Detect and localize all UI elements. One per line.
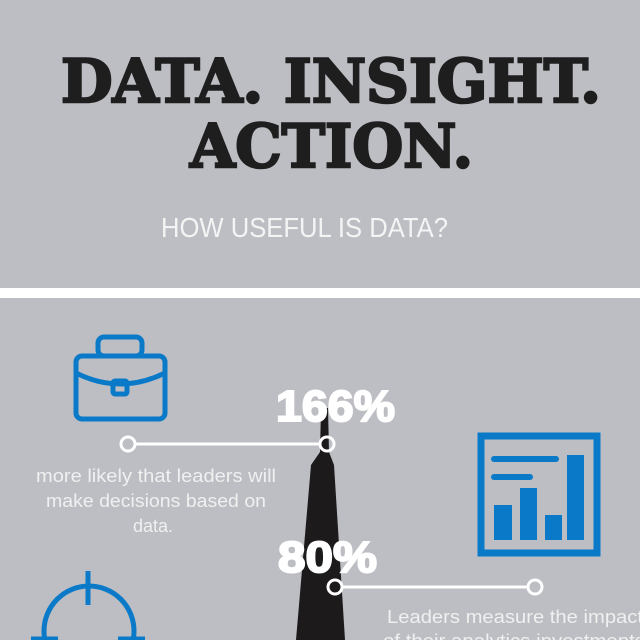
stat 166% xyxy=(121,382,395,451)
title xyxy=(61,47,601,182)
text: 166% description: data. xyxy=(133,516,173,536)
tower spire xyxy=(296,408,345,640)
divider stripe xyxy=(0,288,640,298)
title: DATA. INSIGHT. xyxy=(61,47,601,117)
stat 80%: 80% xyxy=(278,533,377,582)
stat 80% xyxy=(278,533,542,594)
icon: target xyxy=(31,571,145,640)
icon: bar chart xyxy=(481,436,597,553)
subtitle: HOW USEFUL IS DATA? xyxy=(161,212,448,243)
title: ACTION. xyxy=(189,112,473,182)
text: 80% description xyxy=(383,607,640,640)
text: 80% description: Leaders measure the impact xyxy=(387,607,640,627)
text: 166% description: make decisions based on xyxy=(46,491,266,511)
text: 166% description: more likely that leaders will xyxy=(36,466,276,486)
text: 166% description xyxy=(36,466,276,536)
icon: briefcase xyxy=(76,337,165,419)
stat 166%: 166% xyxy=(276,382,395,431)
